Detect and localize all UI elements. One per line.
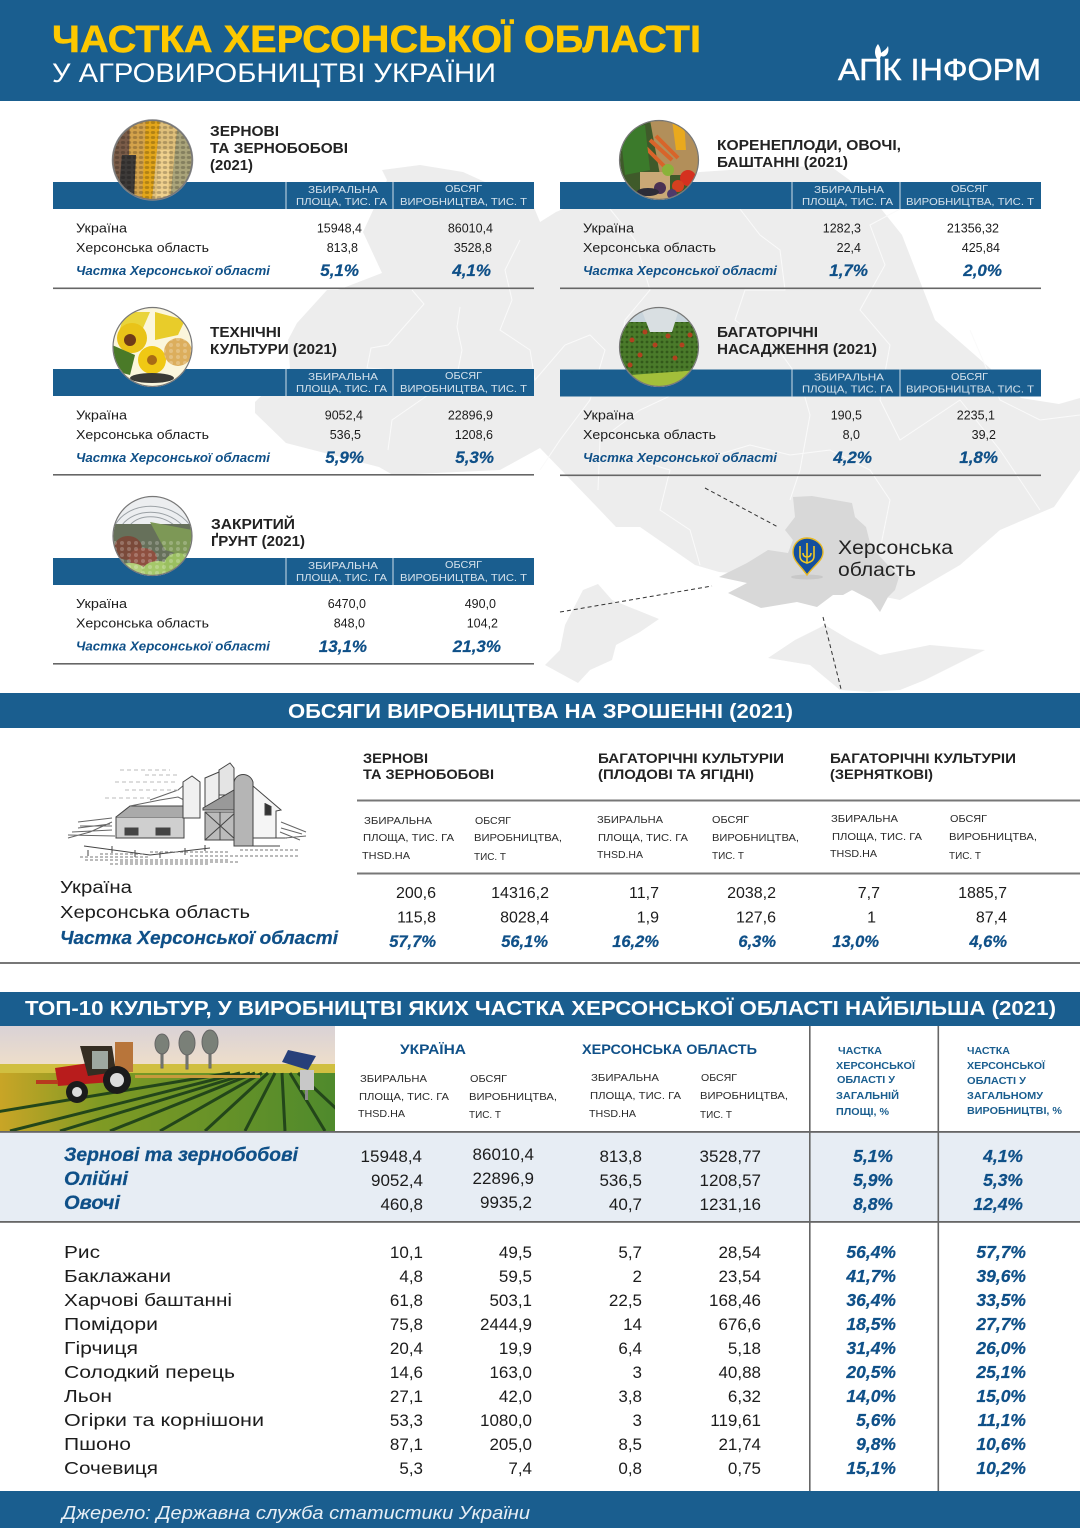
irrigated table: column headers: ЗБИРАЛЬНА	[597, 814, 663, 826]
section band: top 10 crops: ТОП-10 КУЛЬТУР, У ВИРОБНИЦТВІ ЯКИХ ЧАСТКА ХЕРСОНСЬКОЇ ОБЛАСТІ НАЙБІЛЬША (2021)	[25, 996, 1056, 1020]
irrigated table: column group headings: ЗЕРНОВІ	[363, 751, 428, 766]
top-10 table: crop rows: 3	[633, 1411, 642, 1430]
top-10 table: crop rows: 53,3	[390, 1411, 423, 1430]
top-10 table: crop rows: 27,7%	[975, 1314, 1026, 1334]
panel title	[211, 515, 305, 550]
table rows: Україна	[76, 220, 128, 236]
section band: irrigated production	[0, 693, 1080, 728]
icon: orchard circle	[618, 306, 703, 391]
table rows: 536,5	[330, 428, 361, 442]
table rows: 22896,9	[448, 408, 493, 422]
irrigated table: values: 1	[867, 910, 876, 926]
table rows: Україна	[583, 220, 635, 236]
top-10 table: crop rows: 5,3	[399, 1459, 423, 1478]
top-10 table: crop rows: 9,8%	[856, 1434, 896, 1454]
irrigated table: values: 1885,7	[958, 885, 1007, 902]
table header bar: ЗБИРАЛЬНА	[814, 372, 884, 384]
top-10 table: crop rows: 21,74	[718, 1435, 761, 1454]
top-10 table: crop rows: 40,88	[718, 1363, 761, 1382]
table header bar: ОБСЯГ	[951, 371, 988, 383]
table rows: Частка Херсонської області	[76, 450, 270, 465]
irrigated table: row labels: Україна	[60, 877, 132, 897]
panel title: КУЛЬТУРИ (2021)	[210, 342, 337, 358]
table rows: 4,2%	[832, 448, 872, 467]
irrigated table: row labels	[60, 877, 339, 948]
top-10 table: crop rows: 168,46	[709, 1291, 761, 1310]
table header bar	[560, 369, 1041, 397]
table header bar: ОБСЯГ	[951, 183, 988, 195]
subtitle: У АГРОВИРОБНИЦТВІ УКРАЇНИ	[52, 58, 496, 88]
panel title: (2021)	[210, 158, 253, 174]
top-10 table: crop rows: 6,32	[728, 1387, 761, 1406]
irrigated table: column group headings: (ПЛОДОВІ ТА ЯГІДНІ)	[598, 767, 754, 782]
irrigated table: values: 6,3%	[738, 933, 776, 951]
table header bar: ВИРОБНИЦТВА, ТИС. Т	[400, 572, 528, 584]
top-10 table: highlighted rows: 813,8	[599, 1147, 642, 1166]
top-10 table: crop rows: 23,54	[718, 1267, 761, 1286]
top-10 table: crop rows: 36,4%	[846, 1290, 896, 1310]
top-10 table: crop rows: Гірчиця	[64, 1338, 138, 1358]
top-10 table: highlighted rows: 1231,16	[700, 1195, 761, 1214]
table rows: Частка Херсонської області	[76, 263, 270, 278]
map label: Kherson oblast: область	[838, 559, 916, 581]
panel title	[717, 325, 877, 358]
top-10 table: crop rows: 3	[633, 1363, 642, 1382]
top-10 table: crop rows: 2444,9	[480, 1315, 532, 1334]
irrigated table: column headers: ВИРОБНИЦТВА,	[949, 831, 1037, 843]
top-10 table: crop rows: Льон	[64, 1386, 112, 1406]
panel title: ТА ЗЕРНОБОБОВІ	[210, 141, 348, 157]
table rows: 3528,8	[454, 241, 492, 255]
top-10 table: column headers: ОБСЯГ	[701, 1072, 737, 1084]
table rows	[76, 596, 501, 656]
panel: roots, vegetables, melons	[560, 118, 1041, 289]
table rows: 15948,4	[317, 222, 362, 236]
table rows: 22,4	[837, 241, 861, 255]
table header bar: ЗБИРАЛЬНА	[308, 184, 378, 196]
table header bar: ВИРОБНИЦТВА, ТИС. Т	[400, 196, 528, 208]
top-10 table: crop rows: 61,8	[390, 1291, 423, 1310]
table rows: Херсонська область	[583, 427, 716, 442]
top-10 table: share headers: ХЕРСОНСЬКОЇ	[967, 1059, 1046, 1072]
table header bar: ПЛОЩА, ТИС. ГА	[296, 572, 387, 584]
top-10 table: crop rows: 18,5%	[846, 1314, 896, 1334]
table rows: Частка Херсонської області	[583, 450, 777, 465]
top-10 table: crop rows: 7,4	[508, 1459, 532, 1478]
top-10 table: crop rows: 14,0%	[846, 1386, 896, 1406]
irrigated table: values: 4,6%	[968, 933, 1007, 951]
table rows: 1208,6	[455, 428, 493, 442]
panel title: БАШТАННІ (2021)	[717, 155, 848, 171]
irrigated table: column headers: ТИС. Т	[949, 850, 982, 862]
irrigated table: column group headings: БАГАТОРІЧНІ КУЛЬТУРІИ	[598, 751, 784, 766]
table header bar: ПЛОЩА, ТИС. ГА	[296, 196, 387, 208]
panel: industrial crops	[53, 307, 534, 476]
top-10 table: column headers	[358, 1072, 788, 1121]
top-10 table: crop rows: 15,1%	[846, 1458, 896, 1478]
top-10 table: crop rows: 503,1	[489, 1291, 532, 1310]
irrigated table: values: 13,0%	[832, 933, 879, 951]
top-10 table: crop rows	[64, 1242, 1026, 1478]
table rows: 21356,32	[947, 222, 999, 236]
table header bar: ОБСЯГ	[445, 370, 482, 382]
irrigated table: values: 200,6	[396, 885, 436, 902]
top-10 table: crop rows: Рис	[64, 1242, 100, 1262]
top-10 table: share headers: ПЛОЩІ, %	[836, 1106, 890, 1118]
panel title: ТЕХНІЧНІ	[210, 325, 281, 341]
top-10 table: crop rows: Сочевиця	[64, 1458, 158, 1478]
irrigated table: values: 2038,2	[727, 885, 776, 902]
panel: grains	[53, 118, 534, 289]
top-10 table: highlighted rows: 5,9%	[853, 1170, 893, 1190]
table rows: 39,2	[972, 428, 996, 442]
irrigated table: values: 57,7%	[389, 933, 436, 951]
top-10 table: crop rows: 10,1	[390, 1243, 423, 1262]
top-10 table: crop rows: 27,1	[390, 1387, 423, 1406]
table rows: 21,3%	[452, 637, 501, 656]
table header bar: ЗБИРАЛЬНА	[308, 560, 378, 572]
top-10 table: crop rows: 4,8	[399, 1267, 423, 1286]
top-10 table: highlighted rows: 4,1%	[982, 1146, 1023, 1166]
irrigated table: values: 7,7	[858, 885, 880, 902]
table rows: 8,0	[843, 428, 860, 442]
top-10 table: highlighted rows: 1208,57	[700, 1171, 761, 1190]
top-10 table: share headers: ЧАСТКА	[838, 1045, 882, 1057]
top-10 table: crop rows: 22,5	[609, 1291, 642, 1310]
top-10 table: share headers	[836, 1045, 1063, 1118]
irrigated table: column headers: THSD.HA	[362, 850, 410, 862]
table rows	[583, 220, 1002, 280]
top-10 table: column headers: ЗБИРАЛЬНА	[591, 1072, 659, 1084]
table rows: 86010,4	[448, 222, 493, 236]
irrigated table: column headers: ПЛОЩА, ТИС. ГА	[363, 832, 454, 844]
top-10 table: crop rows: 25,1%	[975, 1362, 1026, 1382]
top-10 table: highlighted rows: 15948,4	[361, 1147, 422, 1166]
panel title: КОРЕНЕПЛОДИ, ОВОЧІ,	[717, 138, 901, 154]
top-10 table: crop rows: Пшоно	[64, 1434, 131, 1454]
top-10 table: crop rows: 5,6%	[856, 1410, 896, 1430]
table rows: 5,3%	[455, 448, 494, 467]
title: ЧАСТКА ХЕРСОНСЬКОЇ ОБЛАСТІ	[52, 18, 701, 61]
table rows	[76, 408, 494, 467]
table rows: 2,0%	[962, 261, 1002, 280]
table header bar: ВИРОБНИЦТВА, ТИС. Т	[906, 384, 1035, 396]
top-10 table: crop rows: 14	[623, 1315, 642, 1334]
irrigated table: column headers: ПЛОЩА, ТИС. ГА	[598, 832, 688, 844]
top-10 table: crop rows: 676,6	[718, 1315, 761, 1334]
table header bar: ПЛОЩА, ТИС. ГА	[802, 196, 893, 208]
irrigated table: column group headings: БАГАТОРІЧНІ КУЛЬТУРІИ	[830, 751, 1016, 766]
irrigated table: column headers: ВИРОБНИЦТВА,	[474, 832, 562, 844]
top-10 table: crop rows: 10,2%	[976, 1458, 1026, 1478]
irrigated table: values: 56,1%	[501, 933, 548, 951]
irrigated table: values: 1,9	[637, 910, 659, 926]
top-10 table: column headers: THSD.HA	[358, 1108, 405, 1120]
table rows: 2235,1	[957, 408, 995, 422]
table rows	[583, 408, 998, 467]
table rows: 5,9%	[325, 448, 364, 467]
top-10 table: crop rows: 56,4%	[846, 1242, 896, 1262]
top-10 table: crop rows: 10,6%	[976, 1434, 1026, 1454]
top-10 table: crop rows: Баклажани	[64, 1266, 171, 1286]
top-10 table: crop rows: 8,5	[618, 1435, 642, 1454]
top-10 table: highlighted rows: 9052,4	[371, 1171, 423, 1190]
top-10 table: group headings	[400, 1042, 757, 1057]
top-10 table: column headers: ТИС. Т	[700, 1109, 733, 1121]
top-10 table: crop rows: Помідори	[64, 1314, 158, 1334]
table header bar: ЗБИРАЛЬНА	[308, 371, 378, 383]
top-10 table: highlighted rows: 9935,2	[480, 1193, 532, 1212]
top-10 table: highlighted rows: 5,3%	[983, 1170, 1023, 1190]
top-10 table: crop rows: 205,0	[489, 1435, 532, 1454]
illustration: farm sketch	[68, 763, 306, 864]
irrigated table: values: 87,4	[976, 910, 1007, 926]
top-10 table: crop rows: 119,61	[710, 1411, 761, 1430]
irrigated table: column group headings: (ЗЕРНЯТКОВІ)	[830, 767, 933, 782]
top-10 table: crop rows: 49,5	[499, 1243, 532, 1262]
irrigated table: row labels: Херсонська область	[60, 902, 250, 922]
top-10 table: crop rows: 20,5%	[845, 1362, 896, 1382]
map of Ukraine background	[255, 165, 1080, 692]
top-10 table: column headers: ВИРОБНИЦТВА,	[700, 1090, 788, 1102]
header band	[0, 0, 1080, 101]
top-10 table: highlighted rows: 22896,9	[473, 1169, 534, 1188]
panel: perennial plantings	[560, 306, 1041, 476]
top-10 table: crop rows: 20,4	[390, 1339, 423, 1358]
top-10 table: column headers: ТИС. Т	[469, 1109, 502, 1121]
footer source	[0, 1491, 1080, 1528]
panel title: ЗЕРНОВІ	[210, 124, 279, 140]
table rows	[76, 220, 493, 280]
irrigated table: column headers: ОБСЯГ	[950, 813, 987, 825]
footer source: Джерело: Державна служба статистики України	[60, 1503, 530, 1523]
table rows: 1,7%	[829, 261, 868, 280]
top-10 table: share headers: ОБЛАСТІ У	[967, 1075, 1026, 1087]
top-10 table: crop rows: 0,75	[728, 1459, 761, 1478]
irrigated table: values: 14316,2	[491, 885, 549, 902]
table rows: Україна	[76, 596, 128, 611]
icon: sunflower circle	[112, 307, 192, 387]
top-10 table: crop rows: 41,7%	[845, 1266, 896, 1286]
irrigated table: values: 8028,4	[500, 910, 549, 926]
top-10 table: crop rows: 6,4	[618, 1339, 642, 1358]
icon: map pin with trident	[791, 538, 823, 580]
irrigated table: column headers: ЗБИРАЛЬНА	[831, 813, 898, 825]
table rows: 190,5	[831, 408, 862, 422]
table header bar: ОБСЯГ	[445, 559, 482, 571]
irrigated table: column headers: THSD.HA	[597, 849, 643, 861]
table rows: 9052,4	[325, 408, 363, 422]
top-10 table: crop rows: 15,0%	[976, 1386, 1026, 1406]
top-10 table: crop rows: 5,7	[618, 1243, 642, 1262]
top-10 table: column headers: ЗБИРАЛЬНА	[360, 1073, 427, 1085]
top-10 table: column headers: ПЛОЩА, ТИС. ГА	[590, 1090, 681, 1102]
top-10 table: crop rows: 1080,0	[480, 1411, 532, 1430]
table rows: Херсонська область	[76, 240, 209, 255]
top-10 table: highlighted rows: 5,1%	[853, 1146, 893, 1166]
top-10 table: crop rows: 3,8	[618, 1387, 642, 1406]
top-10 table: highlighted rows	[64, 1145, 1023, 1214]
table rows: 6470,0	[328, 597, 366, 611]
top-10 table: share headers: ВИРОБНИЦТВІ, %	[967, 1105, 1063, 1117]
top-10 table: crop rows: Харчові баштанні	[64, 1290, 232, 1310]
table rows: Україна	[76, 408, 128, 422]
table rows: Херсонська область	[76, 616, 209, 630]
logo: APK-Inform: АПК ІНФОРМ	[838, 52, 1041, 87]
top-10 table: highlighted rows: 8,8%	[853, 1194, 893, 1214]
table rows: Україна	[583, 408, 635, 422]
map label: Kherson oblast	[838, 537, 953, 581]
table rows: 490,0	[465, 597, 496, 611]
table header bar: ВИРОБНИЦТВА, ТИС. Т	[400, 383, 528, 395]
top-10 table: crop rows: 2	[633, 1267, 642, 1286]
top-10 table: crop rows: 39,6%	[976, 1266, 1026, 1286]
top-10 table: crop rows: 75,8	[390, 1315, 423, 1334]
table rows: 813,8	[327, 241, 358, 255]
top-10 table: column headers: THSD.HA	[589, 1108, 636, 1120]
irrigated table: column headers: THSD.HA	[830, 848, 877, 860]
top-10 table: highlighted rows: Зернові та зернобобові	[64, 1145, 299, 1166]
top-10 table: highlighted rows: 536,5	[599, 1171, 642, 1190]
table rows: 5,1%	[320, 261, 359, 280]
table header bar: ПЛОЩА, ТИС. ГА	[802, 384, 893, 396]
irrigated table: values: 16,2%	[612, 933, 659, 951]
top-10 table: crop rows: 59,5	[499, 1267, 532, 1286]
panel title: ҐРУНТ (2021)	[211, 533, 305, 550]
table header bar: ВИРОБНИЦТВА, ТИС. Т	[906, 196, 1035, 208]
top-10 table: crop rows: 14,6	[390, 1363, 423, 1382]
table rows: 848,0	[334, 616, 365, 630]
top-10 table: column headers: ВИРОБНИЦТВА,	[469, 1091, 557, 1103]
top-10 table: crop rows: 33,5%	[976, 1290, 1026, 1310]
irrigated table: column headers: ВИРОБНИЦТВА,	[712, 832, 799, 844]
top-10 table: crop rows: 28,54	[718, 1243, 761, 1262]
irrigated table: column headers: ОБСЯГ	[712, 814, 749, 826]
table rows: 4,1%	[451, 261, 491, 280]
top-10 table: share headers: ЧАСТКА	[967, 1045, 1010, 1057]
icon: grain circle	[110, 118, 195, 203]
section band: irrigated production: ОБСЯГИ ВИРОБНИЦТВА НА ЗРОШЕННІ (2021)	[288, 701, 793, 723]
top-10 table: crop rows: 19,9	[499, 1339, 532, 1358]
table rows: 1282,3	[823, 222, 861, 236]
top-10 table: crop rows: 0,8	[618, 1459, 642, 1478]
top-10 table: highlighted rows: Олійні	[64, 1169, 129, 1190]
top-10 table: share headers: ХЕРСОНСЬКОЇ	[836, 1059, 916, 1072]
table rows: Частка Херсонської області	[76, 638, 270, 654]
top-10 table: column headers: ОБСЯГ	[470, 1073, 507, 1085]
top-10 table: column headers: ПЛОЩА, ТИС. ГА	[359, 1091, 449, 1103]
panel: greenhouse	[53, 496, 534, 665]
irrigated table: column headers: ТИС. Т	[474, 851, 507, 863]
irrigated table: column headers	[357, 800, 1080, 874]
top-10 table: highlighted rows: 12,4%	[973, 1194, 1023, 1214]
icon: vegetables circle	[618, 118, 703, 203]
irrigated table: values: 11,7	[629, 885, 659, 902]
top-10 table: crop rows: 87,1	[390, 1435, 423, 1454]
panel title	[210, 325, 337, 358]
table header bar: ЗБИРАЛЬНА	[814, 184, 884, 196]
table header bar	[53, 558, 534, 585]
dashed map leader lines	[560, 488, 841, 689]
irrigated table: column headers: ОБСЯГ	[475, 815, 511, 827]
irrigated table: row labels: Частка Херсонської області	[60, 928, 339, 948]
irrigated table: column headers: ТИС. Т	[712, 850, 745, 862]
top-10 table: share headers: ОБЛАСТІ У	[837, 1074, 895, 1086]
icon: greenhouse circle	[112, 496, 192, 583]
panel title: ЗАКРИТИЙ	[211, 515, 295, 533]
panel title	[210, 124, 348, 174]
irrigated table: values: 115,8	[397, 910, 436, 926]
table header bar: ОБСЯГ	[445, 183, 482, 195]
highlighted Kherson oblast	[719, 496, 899, 612]
panel title: БАГАТОРІЧНІ	[717, 325, 818, 341]
table rows: 1,8%	[959, 448, 998, 467]
photo: tractor in field	[0, 1026, 360, 1132]
table header bar	[560, 182, 1041, 209]
top-10 table: share headers: ЗАГАЛЬНОМУ	[967, 1090, 1043, 1102]
top-10 table: crop rows: 5,18	[728, 1339, 761, 1358]
top-10 table: crop rows: 42,0	[499, 1387, 532, 1406]
irrigated table: column group headings	[363, 751, 1016, 782]
top-10 table: highlighted rows: 86010,4	[473, 1145, 534, 1164]
irrigated table: column group headings: ТА ЗЕРНОБОБОВІ	[363, 767, 494, 782]
table grid lines	[0, 1026, 1080, 1491]
top-10 table: group headings: УКРАЇНА	[400, 1042, 466, 1057]
top-10 table: group headings: ХЕРСОНСЬКА ОБЛАСТЬ	[582, 1042, 757, 1057]
irrigated table: column headers: ПЛОЩА, ТИС. ГА	[832, 831, 922, 843]
highlighted rows band	[0, 1132, 1080, 1221]
table rows: 425,84	[962, 241, 1000, 255]
irrigated table: values	[389, 885, 1007, 951]
table rows: 13,1%	[319, 637, 367, 656]
panel title: НАСАДЖЕННЯ (2021)	[717, 342, 877, 358]
top-10 table: crop rows: 26,0%	[975, 1338, 1026, 1358]
table rows: 104,2	[467, 616, 498, 630]
top-10 table: crop rows: 57,7%	[976, 1242, 1026, 1262]
table header bar	[53, 369, 534, 396]
top-10 table: crop rows: Солодкий перець	[64, 1362, 235, 1382]
top-10 table: crop rows: Огірки та корнішони	[64, 1410, 264, 1430]
map label: Kherson oblast: Херсонська	[838, 537, 953, 559]
top-10 table: share headers: ЗАГАЛЬНІЙ	[836, 1089, 899, 1102]
top-10 table: crop rows: 11,1%	[978, 1410, 1026, 1430]
section band: top 10 crops	[0, 992, 1080, 1026]
top-10 table: crop rows: 31,4%	[846, 1338, 896, 1358]
table header bar	[53, 182, 534, 209]
irrigated table: column headers: ЗБИРАЛЬНА	[364, 815, 432, 827]
table rows: Херсонська область	[76, 427, 209, 442]
top-10 table: highlighted rows: Овочі	[64, 1193, 121, 1214]
top-10 table: highlighted rows: 3528,77	[700, 1147, 761, 1166]
panel title	[717, 138, 901, 171]
table header bar: ПЛОЩА, ТИС. ГА	[296, 383, 387, 395]
irrigated table: values: 127,6	[736, 910, 776, 926]
top-10 table: crop rows: 163,0	[489, 1363, 532, 1382]
top-10 table: highlighted rows: 40,7	[609, 1195, 642, 1214]
top-10 table: highlighted rows: 460,8	[380, 1195, 423, 1214]
table rows: Частка Херсонської області	[583, 263, 777, 278]
table rows: Херсонська область	[583, 240, 716, 255]
